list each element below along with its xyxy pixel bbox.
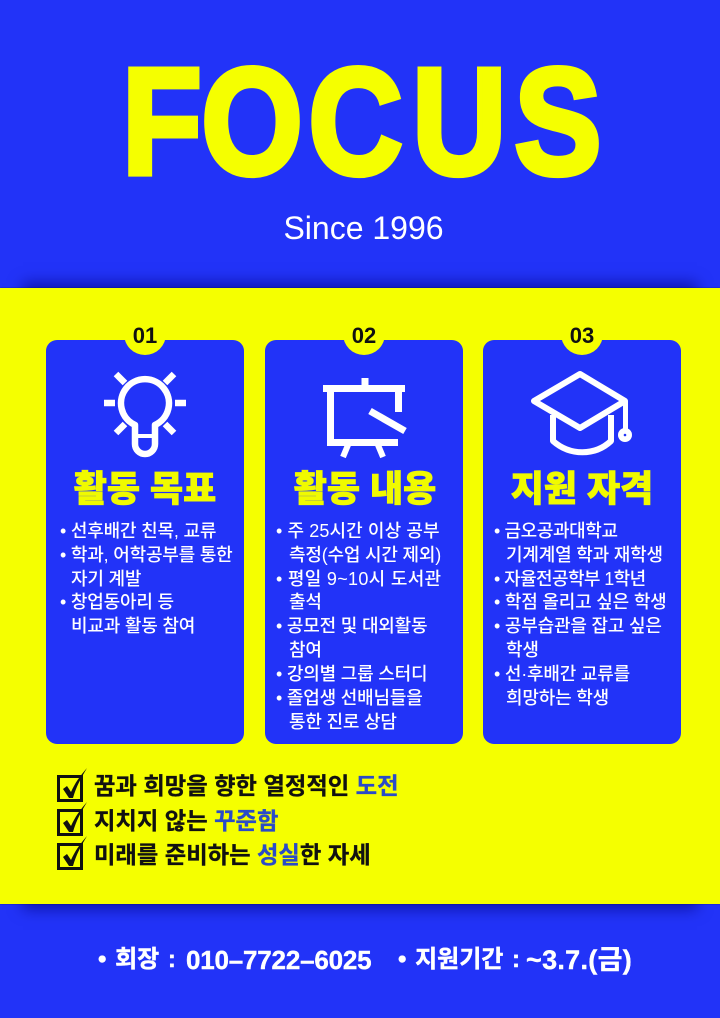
heading: 활동 목표	[74, 468, 216, 509]
president phone: 010–7722–6025	[186, 945, 371, 975]
icon: graduation cap	[531, 371, 632, 456]
item 3	[57, 836, 371, 870]
subtitle: Since 1996: Since 1996	[283, 210, 444, 246]
text: 꿈과 희망을 향한 열정적인 도전	[94, 773, 399, 799]
application period: • 지원기간 :	[398, 946, 520, 973]
heading: 활동 내용	[294, 468, 436, 509]
panel: 지원 자격: • 공부습관을 잡고 싶은	[494, 616, 662, 636]
president phone	[98, 945, 372, 975]
item 2	[57, 802, 278, 836]
item 1	[57, 768, 399, 802]
footer contact	[98, 945, 632, 975]
icon: check box	[57, 802, 87, 836]
panel: 활동 내용: 출석	[289, 592, 322, 612]
panel: 지원 자격: • 학점 올리고 싶은 학생	[494, 592, 667, 612]
panel: 지원 자격: 희망하는 학생	[506, 688, 609, 708]
list	[276, 521, 441, 732]
application period	[398, 945, 632, 975]
panel: 활동 내용: • 강의별 그룹 스터디	[276, 664, 427, 684]
yellow content band	[0, 288, 720, 904]
panel: 활동 목표: 비교과 활동 참여	[71, 616, 195, 636]
panel: 활동 목표: • 학과, 어학공부를 통한	[60, 545, 233, 565]
panel: 지원 자격	[483, 340, 681, 744]
panel: 활동 내용: 통한 진로 상담	[289, 712, 397, 732]
panel: 활동 목표	[46, 340, 244, 744]
heading: 지원 자격	[511, 468, 653, 509]
panel: 지원 자격: 학생	[506, 640, 539, 660]
checklist	[57, 768, 399, 870]
list	[494, 521, 667, 708]
panel: 활동 내용: • 졸업생 선배님들을	[276, 688, 423, 708]
list	[60, 521, 233, 636]
badge 03	[561, 313, 603, 355]
text: 미래를 준비하는 성실한 자세	[94, 842, 371, 868]
panel: 활동 내용: 참여	[289, 640, 322, 660]
panel: 활동 내용: 측정(수업 시간 제외)	[289, 545, 441, 565]
icon: presentation board	[323, 378, 407, 458]
badge 01	[124, 313, 166, 355]
badge 02: 02	[352, 323, 376, 348]
icon: light bulb	[104, 372, 186, 458]
panel: 지원 자격: • 금오공과대학교	[494, 521, 618, 541]
icon: check box	[57, 768, 87, 802]
panel: 활동 내용: • 공모전 및 대외활동	[276, 616, 427, 636]
panel: 활동 내용: • 주 25시간 이상 공부	[276, 521, 440, 541]
badge 03: 03	[570, 323, 594, 348]
panel: 지원 자격: • 자율전공학부 1학년	[494, 569, 646, 589]
panel: 지원 자격: • 선·후배간 교류를	[494, 664, 630, 684]
text: 지치지 않는 꾸준함	[94, 808, 278, 834]
president phone: • 회장 :	[98, 946, 176, 973]
panel: 활동 목표: 자기 계발	[71, 569, 141, 589]
application period: ~3.7.(금)	[526, 945, 632, 975]
badge 01: 01	[133, 323, 157, 348]
panel: 활동 목표: • 창업동아리 등	[60, 592, 174, 612]
panel: 활동 목표: • 선후배간 친목, 교류	[60, 521, 216, 541]
panel: 활동 내용	[265, 340, 463, 744]
icon: check box	[57, 836, 87, 870]
panel: 지원 자격: 기계계열 학과 재학생	[506, 545, 663, 565]
panel: 활동 내용: • 평일 9~10시 도서관	[276, 569, 441, 589]
badge 02	[343, 313, 385, 355]
